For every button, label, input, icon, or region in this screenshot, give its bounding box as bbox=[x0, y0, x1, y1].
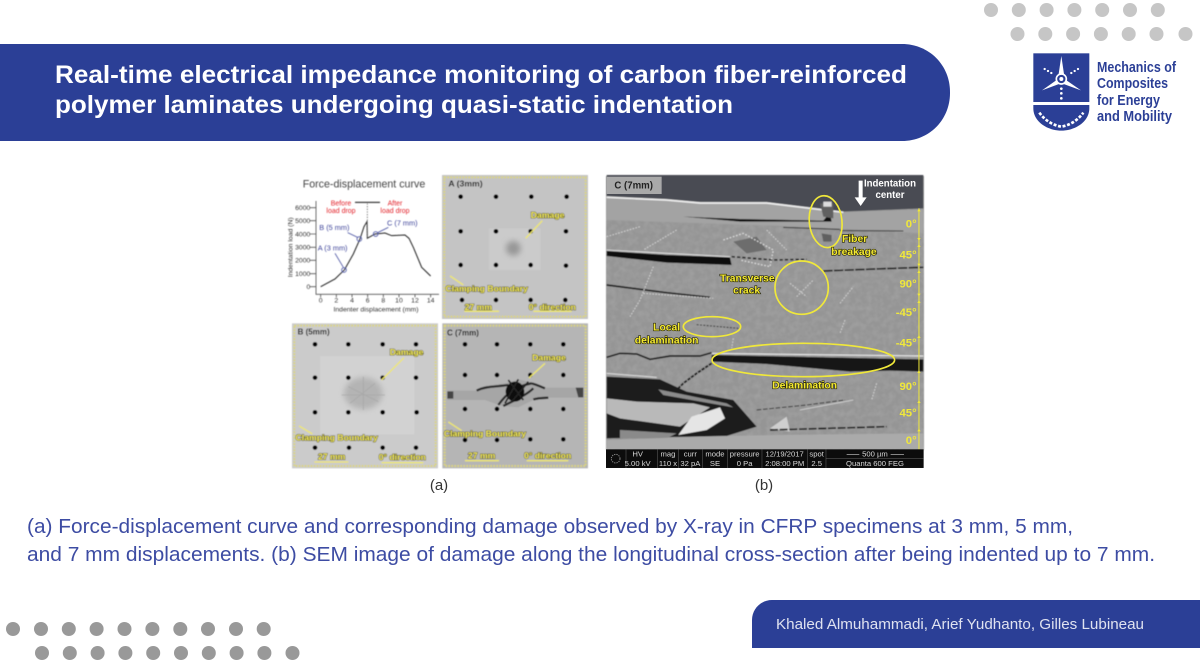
chart: force-displacement curve: Indenter displacement (mm) bbox=[333, 307, 418, 314]
panel: C (7mm) X-ray: 0° direction bbox=[524, 450, 571, 460]
chart: force-displacement curve: Indentation load (N) bbox=[287, 217, 294, 277]
chart: force-displacement curve: 1000 bbox=[295, 271, 311, 278]
SEM info bar: 2:08:00 PM bbox=[765, 459, 804, 468]
panel: A (3mm) X-ray: Damage bbox=[531, 210, 565, 220]
panel: A (3mm) X-ray: A (3mm) bbox=[448, 179, 483, 189]
SEM info bar: spot bbox=[809, 450, 825, 459]
SEM info bar: mag bbox=[661, 450, 675, 459]
panel: B (5mm) X-ray: 27 mm bbox=[318, 451, 346, 461]
logo text: Composites bbox=[1097, 76, 1168, 92]
SEM annotations: 90° bbox=[899, 278, 917, 290]
panel: C (7mm) X-ray: C (7mm) bbox=[447, 328, 479, 337]
SEM annotations: crack bbox=[733, 285, 760, 296]
panel: B (5mm) X-ray bbox=[292, 323, 438, 468]
panel: B (5mm) X-ray: Clamping Boundary bbox=[296, 433, 378, 443]
SEM info bar: Quanta 600 FEG bbox=[846, 459, 904, 468]
author box bbox=[752, 600, 1200, 648]
SEM annotations: 0° bbox=[906, 218, 917, 230]
chart: force-displacement curve: 6000 bbox=[295, 205, 311, 212]
panel: C (7mm) X-ray: Clamping Boundary bbox=[444, 428, 526, 438]
chart: force-displacement curve: 10 bbox=[395, 298, 403, 305]
logo text: Mechanics of bbox=[1097, 60, 1176, 76]
SEM annotations: -45° bbox=[896, 307, 917, 319]
SEM annotations: Indentation bbox=[864, 179, 916, 190]
SEM info bar: SE bbox=[710, 459, 720, 468]
title banner bbox=[0, 44, 950, 141]
panel: A (3mm) X-ray: 0° direction bbox=[529, 302, 576, 312]
logo text: for Energy bbox=[1097, 93, 1160, 109]
SEM annotations: Fiber bbox=[842, 234, 867, 245]
chart: force-displacement curve: 2000 bbox=[295, 258, 311, 265]
SEM info bar: 12/19/2017 bbox=[765, 450, 804, 459]
SEM annotations: 45° bbox=[899, 408, 917, 420]
SEM annotations: -45° bbox=[896, 338, 917, 350]
SEM info bar: 2.5 bbox=[811, 459, 822, 468]
panel: B (5mm) X-ray: 0° direction bbox=[379, 452, 426, 462]
figure (a): force-displacement curve and X-ray panels bbox=[287, 175, 588, 468]
chart: force-displacement curve: 4 bbox=[350, 298, 354, 305]
panel: B (5mm) X-ray: Damage bbox=[390, 347, 424, 357]
chart: force-displacement curve: Force-displacement curve bbox=[303, 178, 425, 190]
SEM info bar: mode bbox=[705, 450, 725, 459]
decorative dots: top right bbox=[984, 3, 1192, 41]
SEM annotations: Local bbox=[653, 322, 680, 333]
SEM info bar: 110 x bbox=[659, 459, 677, 468]
SEM info bar bbox=[606, 449, 924, 468]
SEM annotations: breakage bbox=[831, 247, 877, 258]
chart: force-displacement curve: load drop bbox=[326, 208, 356, 215]
chart: force-displacement curve: 2 bbox=[334, 298, 338, 305]
chart: force-displacement curve: 12 bbox=[411, 298, 419, 305]
title: Real-time electrical impedance monitoring of carbon fiber-reinforced bbox=[55, 61, 907, 89]
label (a): (a) bbox=[430, 477, 448, 494]
SEM annotations: Transverse bbox=[720, 273, 775, 284]
SEM annotations: 90° bbox=[899, 381, 917, 393]
chart: force-displacement curve: B (5 mm) bbox=[319, 223, 349, 232]
panel: B (5mm) X-ray: B (5mm) bbox=[298, 328, 330, 337]
label (b): (b) bbox=[755, 477, 773, 494]
chart: force-displacement curve: C (7 mm) bbox=[387, 219, 418, 228]
title: polymer laminates undergoing quasi-static indentation bbox=[55, 91, 733, 119]
SEM info bar: curr bbox=[684, 450, 697, 459]
panel: A (3mm) X-ray bbox=[442, 175, 588, 319]
panel: A (3mm) X-ray: 27 mm bbox=[465, 302, 492, 312]
SEM annotations: C (7mm) bbox=[614, 181, 653, 192]
chart: force-displacement curve: 6 bbox=[366, 298, 370, 305]
chart: force-displacement curve: load drop bbox=[380, 208, 410, 215]
chart: force-displacement curve: Before bbox=[331, 201, 351, 208]
SEM annotations: 45° bbox=[899, 249, 917, 261]
SEM annotations bbox=[607, 177, 921, 449]
caption: and 7 mm displacements. (b) SEM image of damage along the longitudinal cross-section after being indented up to 7 mm. bbox=[27, 544, 1155, 566]
SEM annotations: 0° bbox=[906, 435, 917, 447]
logo text: and Mobility bbox=[1097, 109, 1172, 125]
SEM info bar: 32 pA bbox=[680, 459, 701, 468]
authors: Khaled Almuhammadi, Arief Yudhanto, Gilles Lubineau bbox=[776, 616, 1144, 633]
SEM photograph bbox=[606, 175, 924, 450]
SEM annotations: center bbox=[875, 190, 905, 201]
figure (b): SEM image of longitudinal cross-section bbox=[606, 175, 924, 468]
SEM info bar: 500 µm bbox=[862, 450, 888, 459]
chart: force-displacement curve: 14 bbox=[427, 298, 435, 305]
panel: A (3mm) X-ray: Clamping Boundary bbox=[446, 284, 528, 294]
icon: shield with wind turbine and laurel bbox=[1033, 53, 1089, 131]
SEM annotations: Delamination bbox=[772, 380, 837, 391]
chart: force-displacement curve: 3000 bbox=[295, 245, 311, 252]
chart: force-displacement curve: After bbox=[388, 201, 403, 208]
chart: force-displacement curve: 5000 bbox=[295, 218, 311, 225]
SEM annotations: delamination bbox=[635, 335, 699, 346]
SEM info bar: HV bbox=[632, 450, 644, 459]
SEM info bar: pressure bbox=[730, 450, 760, 459]
decorative dots: bottom left bbox=[6, 622, 300, 660]
SEM info bar: 0 Pa bbox=[737, 459, 753, 468]
chart: force-displacement curve: 8 bbox=[381, 298, 385, 305]
panel: C (7mm) X-ray: Damage bbox=[532, 353, 566, 363]
chart: force-displacement curve: 0 bbox=[307, 284, 311, 291]
caption: (a) Force-displacement curve and corresponding damage observed by X-ray in CFRP specimens at 3 mm, 5 mm, bbox=[27, 516, 1073, 538]
logo: Mechanics of Composites for Energy and Mobility bbox=[1033, 53, 1176, 131]
SEM info bar: 5.00 kV bbox=[625, 459, 652, 468]
chart: force-displacement curve: A (3 mm) bbox=[318, 243, 348, 252]
chart: force-displacement curve: 0 bbox=[319, 298, 323, 305]
chart: force-displacement curve: 4000 bbox=[295, 231, 311, 238]
panel: C (7mm) X-ray: 27 mm bbox=[468, 451, 496, 461]
panel: C (7mm) X-ray bbox=[442, 323, 588, 468]
chart: force-displacement curve bbox=[287, 178, 439, 314]
